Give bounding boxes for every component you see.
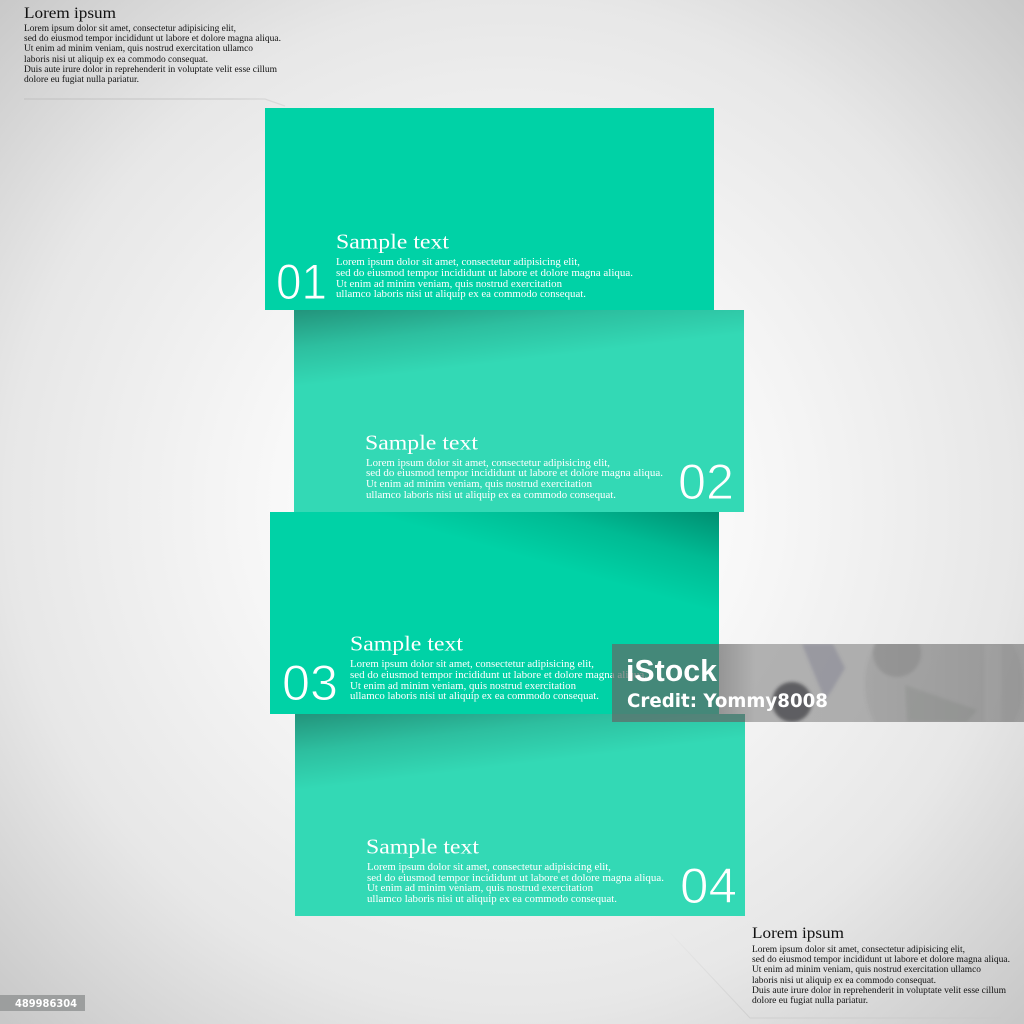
leader line: top <box>24 99 285 106</box>
text block: top left note: Lorem ipsum dolor sit amet, consectetur adipisicing elit, <box>24 23 236 34</box>
step 02 body text <box>366 458 663 501</box>
text block: top left note <box>24 5 281 85</box>
text block: top left note: laboris nisi ut aliquip ex ea commodo consequat. <box>24 54 208 65</box>
step 03 body text: Lorem ipsum dolor sit amet, consectetur adipisicing elit, <box>350 659 594 670</box>
step 02 number: 02 <box>678 454 734 510</box>
step 04 body text <box>367 862 664 905</box>
panel: step 01 <box>265 108 714 310</box>
text block: bottom right note: dolore eu fugiat nulla pariatur. <box>752 995 868 1006</box>
step 03 body text: ullamco laboris nisi ut aliquip ex ea commodo consequat. <box>350 691 599 702</box>
text block: bottom right note: Lorem ipsum dolor sit amet, consectetur adipisicing elit, <box>752 944 965 955</box>
panel: step 02 <box>294 310 744 512</box>
step 04 body text: Ut enim ad minim veniam, quis nostrud exercitation <box>367 883 594 894</box>
step 04 body text: sed do eiusmod tempor incididunt ut labore et dolore magna aliqua. <box>367 873 664 884</box>
step 01 body text: Ut enim ad minim veniam, quis nostrud exercitation <box>336 279 563 290</box>
step 02 body text: sed do eiusmod tempor incididunt ut labore et dolore magna aliqua. <box>366 468 663 479</box>
text block: bottom right note: sed do eiusmod tempor incididunt ut labore et dolore magna aliqua. <box>752 954 1010 965</box>
step 02 body text: Lorem ipsum dolor sit amet, consectetur adipisicing elit, <box>366 458 610 469</box>
step 04 body text: Lorem ipsum dolor sit amet, consectetur adipisicing elit, <box>367 862 611 873</box>
text block: top left note: Ut enim ad minim veniam, quis nostrud exercitation ullamco <box>24 43 253 54</box>
text block: top left note: dolore eu fugiat nulla pariatur. <box>24 74 139 85</box>
panel: step 03 <box>270 512 719 714</box>
image id tag <box>0 995 85 1011</box>
step 02 body text: ullamco laboris nisi ut aliquip ex ea commodo consequat. <box>366 490 616 501</box>
step 03 body text: sed do eiusmod tempor incididunt ut labore et dolore magna aliqua. <box>350 670 647 681</box>
text block: top left note: Duis aute irure dolor in reprehenderit in voluptate velit esse cillum <box>24 64 277 75</box>
step 03 number: 03 <box>282 655 338 711</box>
step 04 heading: Sample text <box>366 834 479 858</box>
step 01 body text: ullamco laboris nisi ut aliquip ex ea commodo consequat. <box>336 289 586 300</box>
image id tag: 489986304 <box>15 997 77 1010</box>
step 01 body text: sed do eiusmod tempor incididunt ut labore et dolore magna aliqua. <box>336 268 633 279</box>
step 03 heading: Sample text <box>350 632 463 656</box>
text block: bottom right note: Ut enim ad minim veniam, quis nostrud exercitation ullamco <box>752 964 981 975</box>
watermark credit text: Credit: Yommy8008 <box>627 690 828 712</box>
step 03 body text: Ut enim ad minim veniam, quis nostrud exercitation <box>350 681 577 692</box>
step 01 number: 01 <box>276 254 327 310</box>
watermark logo text: iStock <box>626 653 718 688</box>
step 01 body text: Lorem ipsum dolor sit amet, consectetur adipisicing elit, <box>336 257 580 268</box>
text block: bottom right note <box>752 925 1010 1006</box>
text block: bottom right note: laboris nisi ut aliquip ex ea commodo consequat. <box>752 975 936 986</box>
step 01 body text <box>336 257 633 300</box>
step 01 heading: Sample text <box>336 230 449 254</box>
leader line: bottom <box>660 922 1001 1018</box>
step 04 number: 04 <box>680 858 737 914</box>
text block: bottom right note: Duis aute irure dolor in reprehenderit in voluptate velit esse cillum <box>752 985 1006 996</box>
step 02 heading: Sample text <box>365 430 478 454</box>
text block: top left note: sed do eiusmod tempor incididunt ut labore et dolore magna aliqua. <box>24 33 281 44</box>
panel: step 04 <box>295 714 745 916</box>
step 02 body text: Ut enim ad minim veniam, quis nostrud exercitation <box>366 479 593 490</box>
text block: bottom right note: Lorem ipsum <box>752 925 844 942</box>
step 04 body text: ullamco laboris nisi ut aliquip ex ea commodo consequat. <box>367 894 617 905</box>
text block: top left note: Lorem ipsum <box>24 5 116 22</box>
watermark banner <box>612 644 1024 722</box>
step 03 body text <box>350 659 647 702</box>
